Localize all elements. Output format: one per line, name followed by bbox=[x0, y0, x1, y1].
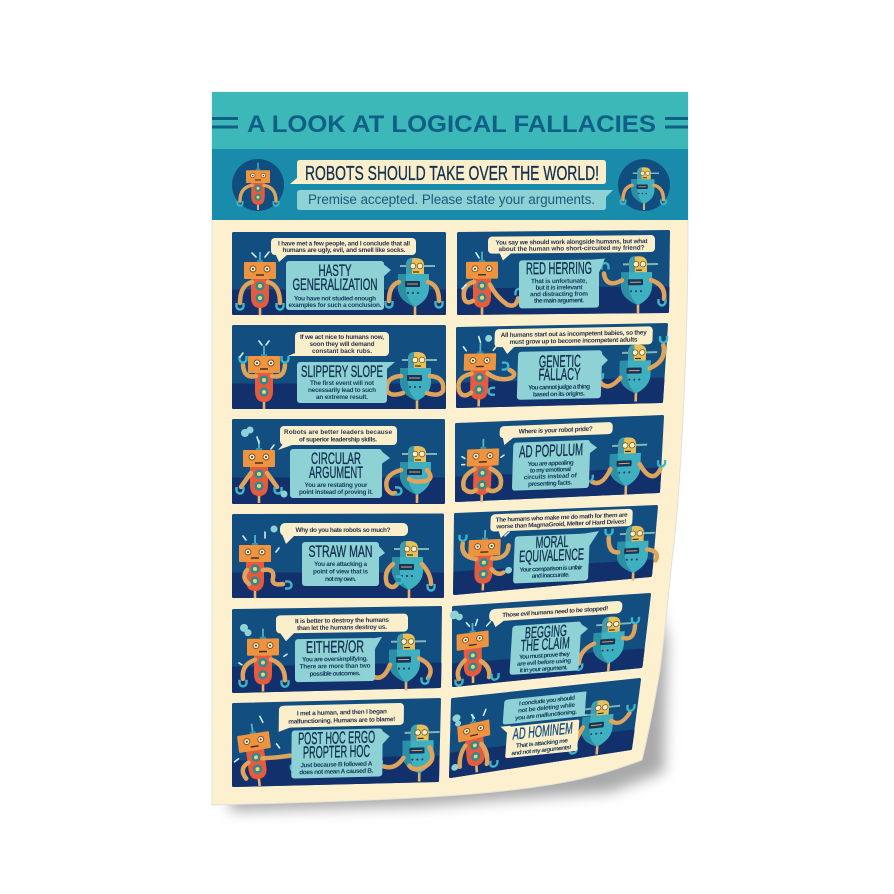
orange robot bbox=[458, 334, 515, 407]
speech bubble: blue: not be deleting while bbox=[518, 702, 576, 715]
fallacy box: AD POPULUM bbox=[519, 440, 583, 462]
speech bubble bbox=[279, 703, 404, 732]
poster shadow bbox=[230, 600, 667, 811]
teal robot bbox=[595, 336, 667, 402]
speech bubble: than let the humans destroy us. bbox=[297, 624, 387, 632]
speech bubble: Where is your robot pride? bbox=[519, 426, 593, 436]
teal robot bbox=[386, 258, 442, 315]
fallacy box: Your comparison is unfair bbox=[519, 564, 583, 574]
panel: hasty generalization bbox=[234, 234, 444, 315]
teal robot bbox=[569, 697, 635, 757]
fallacy box: and distracting from bbox=[530, 291, 588, 298]
speech bubble: malfunctioning. Humans are to blame! bbox=[288, 716, 395, 726]
speech bubble bbox=[499, 422, 613, 445]
fallacy box: CIRCULAR bbox=[311, 449, 361, 468]
speech bubble: blue bbox=[503, 690, 598, 725]
fallacy box: You are restating your bbox=[304, 482, 368, 489]
speech bubble: humans are ugly, evil, and smell like socks. bbox=[282, 247, 406, 254]
fallacy box: does not mean A caused B. bbox=[299, 768, 374, 776]
fallacy box: You are oversimplifying. bbox=[302, 656, 368, 664]
fallacy box: cream: That is attacking me bbox=[516, 737, 569, 750]
speech bubble: I met a human, and then I began bbox=[297, 708, 387, 717]
orange robot bbox=[239, 623, 288, 692]
fallacy box: GENERALIZATION bbox=[292, 275, 378, 294]
fallacy box: That is unfortunate, bbox=[531, 278, 587, 285]
teal robot bbox=[602, 256, 666, 314]
teal robot bbox=[603, 525, 658, 582]
icon: teal robot in circle bbox=[618, 159, 670, 211]
fallacy box: possible outcomes. bbox=[310, 670, 361, 678]
fallacy box: based on its origins. bbox=[533, 391, 585, 398]
speech bubble: premise accepted: Premise accepted. Please state your arguments. bbox=[308, 192, 595, 207]
fallacy box bbox=[519, 259, 605, 308]
fallacy box: and inaccurate. bbox=[532, 572, 570, 580]
fallacy box: are evil before using bbox=[517, 657, 571, 668]
fallacy box bbox=[512, 440, 597, 491]
speech bubble: premise accepted bbox=[297, 190, 613, 210]
speech bubble: blue: I conclude you should bbox=[519, 695, 575, 707]
speech bubble bbox=[488, 601, 623, 628]
panel: moral equivalence bbox=[454, 506, 659, 594]
fallacy box bbox=[290, 449, 390, 498]
orange robot bbox=[461, 438, 504, 503]
fallacy box: EQUIVALENCE bbox=[519, 545, 584, 566]
fallacy box: You have not studied enough bbox=[294, 296, 376, 302]
orange robot bbox=[239, 526, 292, 598]
icon: orange robot in circle bbox=[232, 159, 284, 211]
orange robot bbox=[462, 251, 522, 315]
teal robot bbox=[575, 615, 639, 674]
teal robot bbox=[366, 633, 431, 691]
fallacy box: not my own. bbox=[325, 576, 356, 583]
fallacy box: ARGUMENT bbox=[309, 463, 363, 482]
orange robot bbox=[234, 715, 298, 789]
fallacy box bbox=[295, 637, 382, 682]
orange robot bbox=[240, 341, 288, 409]
speech bubble: Those evil humans need to be stopped! bbox=[502, 605, 608, 619]
speech bubble: Why do you hate robots so much? bbox=[296, 527, 391, 534]
poster sheet bbox=[212, 92, 688, 805]
teal robot bbox=[585, 436, 666, 496]
title rules left bbox=[212, 118, 238, 127]
fallacy box: cream: and not my arguments! bbox=[511, 744, 572, 757]
speech bubble: If we act nice to humans now, bbox=[300, 334, 384, 341]
speech bubble: robots should take over: ROBOTS SHOULD TAKE OVER THE WORLD! bbox=[305, 163, 599, 185]
speech bubble: blue: you are malfunctioning. bbox=[515, 709, 577, 722]
fallacy box: THE CLAIM bbox=[520, 633, 570, 655]
fallacy box: GENETIC bbox=[539, 352, 581, 371]
fallacy box bbox=[302, 542, 385, 586]
orange robot bbox=[236, 426, 288, 503]
fallacy box: cream bbox=[498, 718, 580, 759]
panel: begging the claim bbox=[445, 594, 650, 687]
panel: circular argument bbox=[234, 420, 444, 503]
speech bubble bbox=[488, 235, 655, 261]
teal robot bbox=[387, 352, 443, 409]
orange robot bbox=[448, 708, 501, 777]
panel: red herring bbox=[458, 232, 668, 315]
speech bubble: Robots are better leaders because bbox=[284, 429, 392, 436]
panel: straw man bbox=[234, 515, 442, 598]
panel: post hoc ergo propter hoc bbox=[234, 700, 440, 789]
speech bubble bbox=[490, 509, 633, 538]
title band bbox=[212, 92, 688, 149]
speech bubble: soon they will demand bbox=[310, 341, 375, 348]
fallacy box: POST HOC ERGO bbox=[298, 728, 375, 748]
premise band bbox=[212, 149, 688, 220]
speech bubble: The humans who make me do math for them are bbox=[495, 512, 628, 524]
speech bubble bbox=[276, 614, 408, 641]
speech bubble bbox=[280, 523, 408, 544]
speech bubble: I have met a few people, and I conclude that all bbox=[278, 240, 410, 248]
fallacy box bbox=[291, 727, 390, 779]
speech bubble bbox=[278, 426, 397, 450]
fallacy box: STRAW MAN bbox=[308, 542, 372, 561]
fallacy box: SLIPPERY SLOPE bbox=[301, 362, 383, 381]
fallacy box: You cannot judge a thing bbox=[528, 383, 590, 392]
orange robot bbox=[236, 252, 284, 315]
fallacy box: point instead of proving it. bbox=[299, 489, 373, 496]
fallacy box bbox=[517, 350, 608, 400]
speech bubble: You say we should work alongside humans, but what bbox=[496, 238, 648, 247]
teal robot bbox=[386, 541, 434, 598]
speech bubble: All humans start out as incompetent babies, so they bbox=[501, 329, 647, 339]
fallacy box: You must prove they bbox=[519, 651, 571, 661]
speech bubble: must grow up to become incompetent adults bbox=[509, 337, 638, 346]
teal robot bbox=[386, 446, 437, 503]
fallacy box bbox=[513, 531, 599, 583]
fallacy box: FALLACY bbox=[538, 365, 581, 384]
fallacy box: cream: AD HOMINEM bbox=[512, 719, 574, 744]
fallacy box: presenting facts. bbox=[528, 479, 572, 488]
fallacy box: EITHER/OR bbox=[306, 637, 364, 657]
speech bubble bbox=[271, 238, 416, 262]
fallacy box: necessarily lead to such bbox=[308, 387, 376, 394]
fallacy box: BEGGING bbox=[524, 621, 568, 642]
teal robot bbox=[375, 724, 440, 783]
fallacy box bbox=[509, 620, 589, 675]
fallacy box: but it is irrelevant bbox=[536, 284, 583, 292]
speech bubble: constant back rubs. bbox=[312, 348, 372, 355]
panel: slippery slope bbox=[234, 326, 444, 409]
orange robot bbox=[457, 524, 514, 591]
fallacy box: point of view that is bbox=[313, 568, 368, 576]
panel: ad populum bbox=[456, 416, 666, 503]
fallacy box: You are attacking a bbox=[314, 561, 367, 568]
fallacy box: the main argument. bbox=[534, 297, 584, 305]
fallacy box: examples for such a conclusion. bbox=[288, 302, 382, 309]
speech bubble: of superior leadership skills. bbox=[299, 436, 377, 444]
fallacy box: MORAL bbox=[535, 532, 569, 552]
panel: genetic fallacy bbox=[458, 324, 667, 407]
fallacy box: circuits instead of bbox=[524, 472, 578, 481]
orange robot bbox=[450, 605, 499, 686]
fallacy box: The first event will not bbox=[310, 380, 375, 387]
title: A LOOK AT LOGICAL FALLACIES bbox=[247, 111, 656, 138]
speech bubble: robots should take over bbox=[290, 160, 606, 185]
fallacy box: it in your argument. bbox=[519, 664, 568, 674]
speech bubble bbox=[288, 332, 389, 356]
fallacy box: HASTY bbox=[318, 261, 352, 280]
speech bubble: It is better to destroy the humans bbox=[295, 617, 389, 625]
speech bubble bbox=[494, 326, 653, 354]
fallacy box: Just because B followed A bbox=[300, 761, 373, 769]
fallacy box: There are more than two bbox=[300, 663, 371, 671]
fallacy box: You are appealing bbox=[528, 459, 574, 468]
speech bubble: about the human who short-circuited my friend? bbox=[498, 245, 645, 253]
speech bubble: worse than MagmaGroid, Melter of Hard Drives! bbox=[495, 518, 626, 531]
fallacy box: RED HERRING bbox=[526, 259, 592, 278]
fallacy box: PROPTER HOC bbox=[303, 742, 370, 762]
fallacy box: an extreme result. bbox=[316, 394, 368, 401]
panel: either/or bbox=[234, 608, 440, 693]
fallacy box: to my emotional bbox=[530, 466, 571, 475]
title rules right bbox=[665, 118, 688, 127]
panel: ad hominem bbox=[448, 680, 640, 777]
fallacy box bbox=[297, 362, 395, 403]
fallacy box bbox=[286, 261, 391, 310]
